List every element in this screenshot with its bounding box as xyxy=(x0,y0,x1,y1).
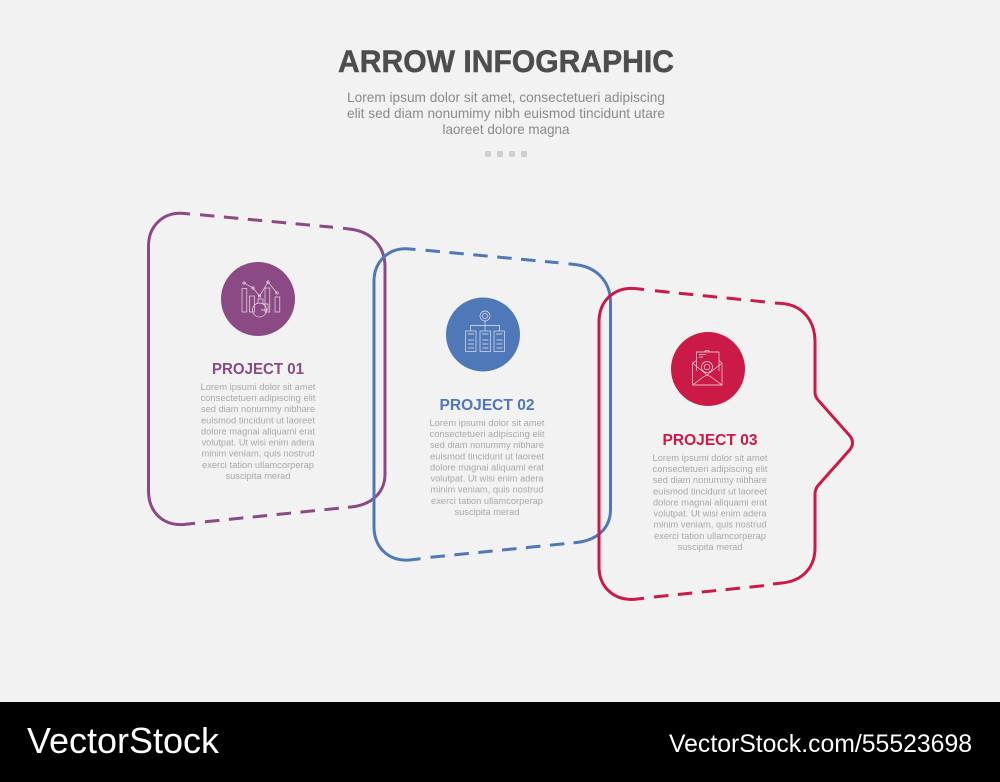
subtitle: Lorem ipsum dolor sit amet, consectetueri adipiscing xyxy=(347,90,665,105)
text: project 02: volutpat. Ut wisi enim adera xyxy=(430,474,544,484)
text: project 02: dolore magnai aliquami erat xyxy=(430,462,544,472)
icon: chart in circle xyxy=(221,262,295,336)
title: ARROW INFOGRAPHIC xyxy=(338,43,674,79)
subtitle: elit sed diam nonumimy nibh euismod tincidunt utare xyxy=(347,106,665,121)
panel: project 02 xyxy=(374,249,610,560)
watermark bar xyxy=(0,702,1000,782)
text: project 03: exerci tation ullamcorperap xyxy=(654,531,766,541)
text: project 02: Lorem ipsumi dolor sit amet xyxy=(430,418,545,428)
text: project 03 xyxy=(652,453,768,552)
text: project 02 xyxy=(430,418,545,517)
text: project 03: dolore magnai aliquami erat xyxy=(653,497,767,507)
text: project 03: minim veniam, quis nostrud xyxy=(654,520,766,530)
text: project 03: euismod tincidunt ut laoreet xyxy=(653,486,767,496)
text: project 01: sed diam nonummy nibhare xyxy=(201,404,315,414)
dots divider xyxy=(485,151,527,157)
watermark logo: VectorStock xyxy=(27,720,220,761)
outline: project 01 xyxy=(148,213,385,525)
subtitle: laoreet dolore magna xyxy=(442,122,570,137)
watermark url: VectorStock.com/55523698 xyxy=(669,730,972,758)
text: project 02: exerci tation ullamcorperap xyxy=(431,496,543,506)
text: project 01: euismod tincidunt ut laoreet xyxy=(201,415,315,425)
heading: project 02: PROJECT 02 xyxy=(440,397,534,414)
text: project 02: consectetueri adipiscing elit xyxy=(430,429,545,439)
icon: envelope in circle xyxy=(671,332,745,406)
text: project 03: Lorem ipsumi dolor sit amet xyxy=(652,453,768,463)
text: project 01: suscipita merad xyxy=(226,471,290,481)
text: project 03: suscipita merad xyxy=(678,542,742,552)
text: project 01: Lorem ipsumi dolor sit amet xyxy=(200,382,316,392)
heading: project 03: PROJECT 03 xyxy=(662,432,758,449)
text: project 03: sed diam nonummy nibhare xyxy=(653,475,767,485)
text: project 03: consectetueri adipiscing elit xyxy=(652,464,768,474)
text: project 01 xyxy=(200,382,316,481)
text: project 01: minim veniam, quis nostrud xyxy=(202,449,314,459)
outline: project 03 arrow xyxy=(599,288,852,599)
text: project 01: volutpat. Ut wisi enim adera xyxy=(202,438,315,448)
outline: project 02 xyxy=(374,249,610,560)
icon: workflow in circle xyxy=(446,298,520,372)
panel: project 01 xyxy=(148,213,385,525)
text: project 01: exerci tation ullamcorperap xyxy=(202,460,314,470)
text: project 01: consectetueri adipiscing elit xyxy=(200,393,316,403)
text: project 02: euismod tincidunt ut laoreet xyxy=(430,451,544,461)
text: project 02: minim veniam, quis nostrud xyxy=(430,485,544,495)
heading: project 01: PROJECT 01 xyxy=(212,361,304,378)
text: project 01: dolore magnai aliquami erat xyxy=(201,426,315,436)
text: project 02: sed diam nonummy nibhare xyxy=(430,440,544,450)
panel: project 03 xyxy=(599,288,852,599)
subtitle xyxy=(347,90,665,137)
text: project 02: suscipita merad xyxy=(454,507,520,517)
text: project 03: volutpat. Ut wisi enim adera xyxy=(654,508,767,518)
